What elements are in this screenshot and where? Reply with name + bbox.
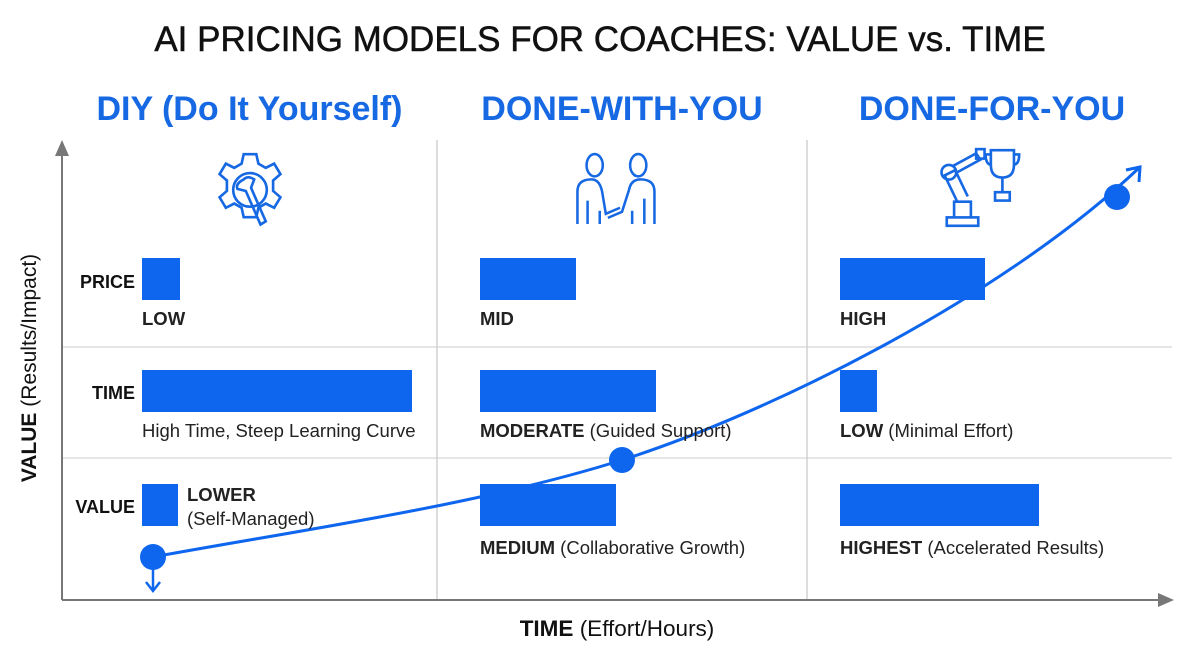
icon: gear wrench (218, 152, 282, 226)
title: AI PRICING MODELS FOR COACHES: VALUE vs. TIME (154, 20, 1046, 59)
text: High Time, Steep Learning Curve (142, 420, 416, 441)
heading: Done-with-you: DONE-WITH-YOU (481, 90, 763, 128)
text: (Self-Managed) (187, 508, 315, 529)
text: VALUE (75, 497, 135, 517)
icon: robot arm trophy (940, 148, 1020, 228)
y-axis label: VALUE (Results/Impact) (18, 254, 41, 482)
text: MID (480, 308, 514, 329)
text: TIME (92, 383, 135, 403)
row labels: PRICE (80, 272, 135, 292)
text: MEDIUM (Collaborative Growth) (480, 537, 745, 558)
DWY bars (480, 258, 745, 558)
text: LOWER (187, 484, 256, 505)
text: HIGH (840, 308, 886, 329)
DIY bars (142, 258, 416, 529)
text: LOW (142, 308, 185, 329)
x-axis label: TIME (Effort/Hours) (520, 616, 714, 641)
text: MODERATE (Guided Support) (480, 420, 732, 441)
text: HIGHEST (Accelerated Results) (840, 537, 1104, 558)
icon: handshake (576, 152, 656, 224)
heading: Done-for-you: DONE-FOR-YOU (859, 90, 1125, 128)
DFY bars (840, 258, 1104, 558)
text: LOW (Minimal Effort) (840, 420, 1013, 441)
heading: DIY: DIY (Do It Yourself) (96, 90, 403, 128)
